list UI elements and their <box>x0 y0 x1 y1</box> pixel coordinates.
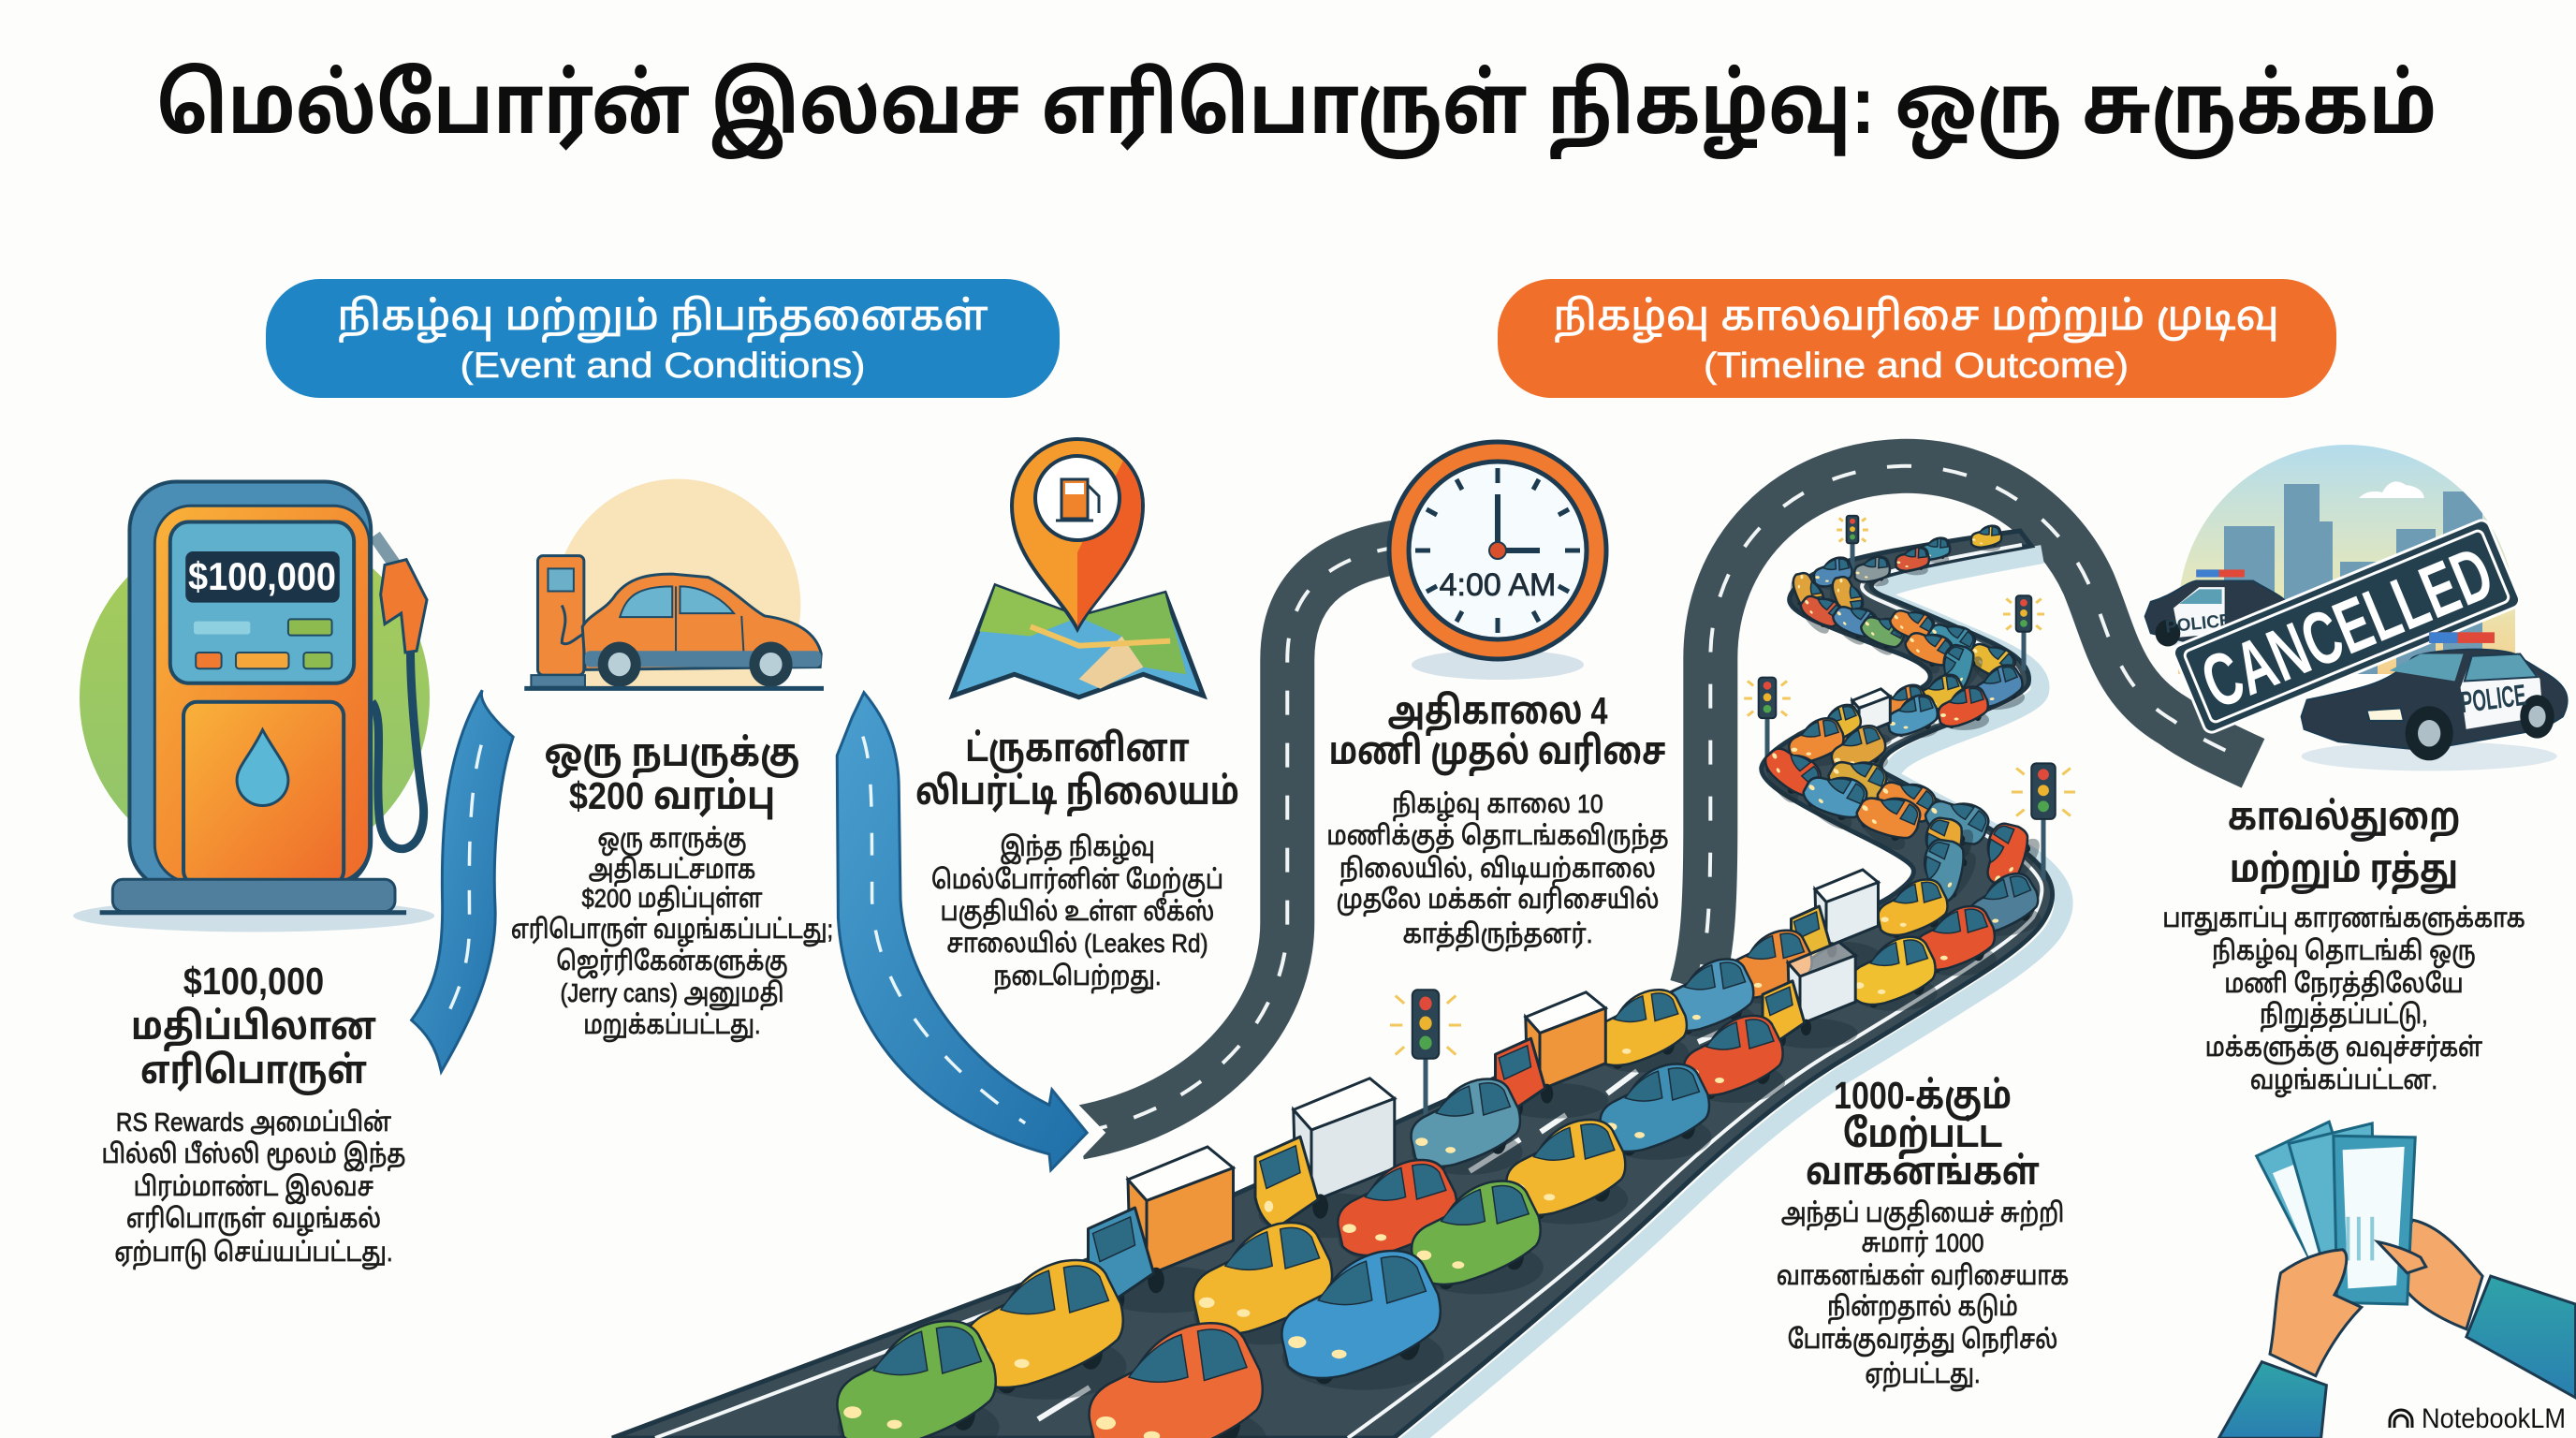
body text: அந்தப் பகுதியைச் சுற்றி <box>1781 1197 2064 1231</box>
icon: hands holding vouchers <box>2218 1122 2576 1438</box>
body text: நிகழ்வு தொடங்கி ஒரு <box>2212 935 2476 969</box>
icon: fuel pump: $100,000 <box>188 554 336 598</box>
body text: நிறுத்தப்பட்டு, <box>2260 999 2428 1033</box>
body text: ஒரு காருக்கு <box>597 823 747 857</box>
body text: சாலையில் (Leakes Rd) <box>946 928 1208 958</box>
body text: நிலையில், விடியற்காலை <box>1339 854 1656 887</box>
section heading: event and conditions: நிகழ்வு மற்றும் நிபந்தனைகள் <box>337 294 988 343</box>
body text: அதிகபட்சமாக <box>589 854 755 887</box>
section heading: timeline and outcome: நிகழ்வு காலவரிசை மற்றும் முடிவு <box>1554 294 2278 343</box>
heading <box>915 726 1239 816</box>
body text <box>1777 1197 2069 1392</box>
heading: மேற்பட்ட <box>1843 1112 2002 1159</box>
heading: மதிப்பிலான <box>131 1005 376 1051</box>
body text: ஜெர்ரிகேன்களுக்கு <box>556 946 788 979</box>
icon: police cars and cancelled sign: POLICE <box>2164 610 2232 638</box>
traffic lights <box>1390 516 2075 1133</box>
body text <box>511 823 833 1042</box>
heading: 1000-க்கும் <box>1834 1074 2012 1121</box>
text block: $200 limit <box>511 732 833 1042</box>
body text: ஏற்பட்டது. <box>1865 1358 1981 1392</box>
icon: map with location pin <box>953 439 1204 697</box>
body text: $200 மதிப்புள்ள <box>582 883 763 916</box>
icon: clock showing 4:00 AM: 4:00 AM <box>1440 567 1556 603</box>
icon: police cars and cancelled sign: POLICE <box>2459 678 2528 719</box>
highway with traffic queue <box>612 516 2075 1438</box>
body text: (Jerry cans) அனுமதி <box>560 977 784 1010</box>
section heading: event and conditions: (Event and Conditions) <box>461 346 865 386</box>
arrow: dark road from map to clock <box>1074 547 1401 1167</box>
heading: எரிபொருள் <box>140 1049 367 1096</box>
body text <box>102 1107 405 1270</box>
heading <box>131 961 376 1096</box>
arrow: blue road segment between first two items <box>412 690 513 1072</box>
heading <box>545 732 799 820</box>
icon: car at fuel station <box>519 479 837 738</box>
heading: வாகனங்கள் <box>1806 1150 2040 1193</box>
body text <box>2162 902 2525 1098</box>
icon: fuel pump <box>73 481 434 932</box>
body text: RS Rewards அமைப்பின் <box>116 1107 391 1137</box>
arrow: road arch towards cancellation <box>1696 466 2253 988</box>
body text: முதலே மக்கள் வரிசையில் <box>1336 885 1660 916</box>
heading: அதிகாலை 4 <box>1388 689 1608 736</box>
body text: பாதுகாப்பு காரணங்களுக்காக <box>2162 902 2525 936</box>
body text: எரிபொருள் வழங்கப்பட்டது; <box>511 914 833 946</box>
section heading: timeline and outcome <box>1498 279 2336 398</box>
heading <box>1329 689 1666 776</box>
icon: police cars and cancelled sign <box>2145 445 2568 770</box>
text block: queue from 4am <box>1326 689 1669 952</box>
body text: இந்த நிகழ்வு <box>1000 831 1155 865</box>
heading: ட்ருகானினா <box>965 726 1190 773</box>
body text: வழங்கப்பட்டன. <box>2250 1064 2437 1098</box>
body text: மணிக்குத் தொடங்கவிருந்த <box>1326 821 1669 854</box>
body text: எரிபொருள் வழங்கல் <box>126 1203 381 1237</box>
section heading: timeline and outcome: (Timeline and Outcome) <box>1704 346 2129 386</box>
heading: மற்றும் ரத்து <box>2230 847 2458 894</box>
queue of distant cars <box>1758 522 2047 941</box>
icon: clock showing 4:00 AM <box>1389 442 1606 680</box>
text block: $100,000 fuel <box>102 961 405 1270</box>
body text: மணி நேரத்திலேயே <box>2224 968 2464 1002</box>
foreground cars and trucks <box>837 870 1997 1438</box>
body text <box>1326 789 1669 952</box>
heading: லிபர்ட்டி நிலையம் <box>915 770 1239 816</box>
arrow: blue curved road with arrowhead <box>837 693 1087 1170</box>
text block: police and cancellation <box>2162 795 2525 1098</box>
body text: ஏற்பாடு செய்யப்பட்டது. <box>114 1237 393 1270</box>
heading: $100,000 <box>183 961 324 1004</box>
body text: போக்குவரத்து நெரிசல் <box>1788 1324 2057 1357</box>
text block: Truganina Liberty station <box>915 726 1239 994</box>
body text: நின்றதால் கடும் <box>1827 1291 2018 1325</box>
section heading: event and conditions <box>266 279 1060 398</box>
heading: மணி முதல் வரிசை <box>1329 729 1666 776</box>
body text: பகுதியில் உள்ள லீக்ஸ் <box>941 896 1214 930</box>
body text: மெல்போர்னின் மேற்குப் <box>931 864 1223 898</box>
body text: மக்களுக்கு வவுச்சர்கள் <box>2205 1032 2482 1065</box>
heading: காவல்துறை <box>2228 795 2460 842</box>
body text: வாகனங்கள் வரிசையாக <box>1777 1260 2069 1290</box>
body text: பில்லி பீஸ்லி மூலம் இந்த <box>102 1138 405 1172</box>
heading <box>2228 795 2460 894</box>
body text: நிகழ்வு காலை 10 <box>1392 789 1603 822</box>
body text: மறுக்கப்பட்டது. <box>583 1009 761 1042</box>
body text: சுமார் 1000 <box>1861 1227 1984 1257</box>
text block: 1000+ vehicles <box>1777 1074 2069 1392</box>
body text: பிரம்மாண்ட இலவச <box>134 1171 373 1204</box>
body text: காத்திருந்தனர். <box>1402 919 1593 952</box>
heading <box>1806 1074 2040 1193</box>
body text <box>931 831 1223 994</box>
body text: நடைபெற்றது. <box>993 961 1162 994</box>
heading: $200 வரம்பு <box>569 775 775 820</box>
heading: ஒரு நபருக்கு <box>545 732 799 779</box>
